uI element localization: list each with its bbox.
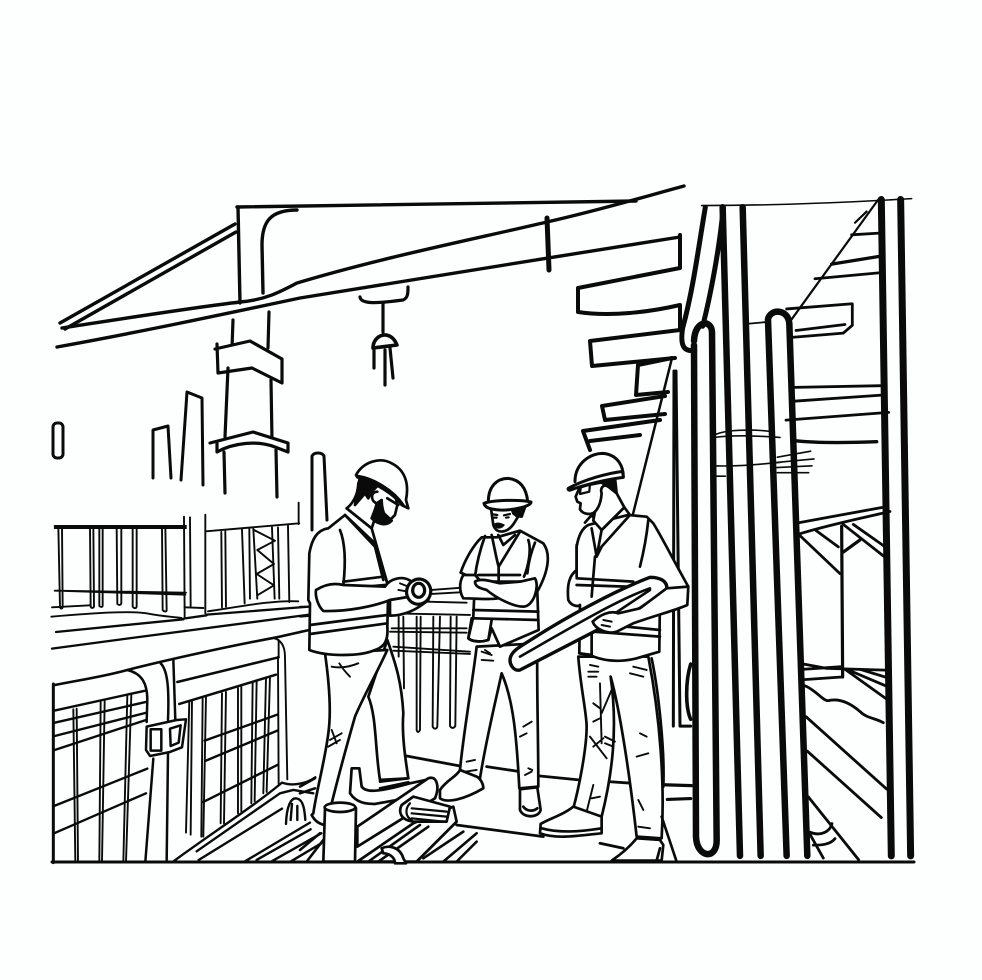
strap and buckle (127, 659, 186, 862)
left pipe bundle (663, 371, 691, 799)
worker middle: head and helmet (484, 478, 531, 532)
worker middle: crossed arms (460, 575, 537, 607)
upper fence (51, 515, 205, 618)
worker right: boots (540, 807, 663, 861)
concrete column (210, 312, 288, 497)
workers (300, 453, 688, 863)
rolled blueprint (510, 577, 667, 670)
floor slab foreground (173, 777, 321, 862)
worker middle: legs (460, 643, 538, 788)
distant buildings (53, 392, 327, 530)
worker middle: torso and vest (461, 531, 548, 647)
ground line (52, 860, 914, 864)
worker right: head and helmet (568, 453, 624, 530)
thin top line (702, 199, 912, 206)
worker right: legs (573, 657, 677, 862)
right bay structure (713, 199, 890, 860)
upper right scaffold (206, 503, 299, 611)
worker left: torso and vest (308, 508, 388, 655)
worker left: front leg (312, 650, 387, 827)
pipes (682, 207, 705, 351)
background fence behind workers and floor (300, 587, 633, 848)
tape roll (403, 576, 434, 608)
stacked shelves on the right (578, 235, 680, 514)
crane hook (360, 287, 408, 385)
ledge lines (52, 607, 309, 649)
worker left: arm and hands (316, 578, 428, 616)
worker right: torso and vest (568, 507, 688, 661)
worker middle: boots (440, 770, 541, 816)
crane beam (57, 186, 684, 347)
foreground scaffold poles at right (663, 199, 912, 860)
lower left fence (53, 630, 309, 863)
foreground post (323, 803, 356, 862)
lower right fence (177, 638, 287, 837)
worker left: back leg (350, 640, 433, 804)
foreground pipes and timber (300, 778, 477, 863)
worker left: head and helmet (347, 460, 408, 528)
worker right: arm and hand (593, 587, 688, 633)
railings and ledge on the left (51, 503, 321, 863)
